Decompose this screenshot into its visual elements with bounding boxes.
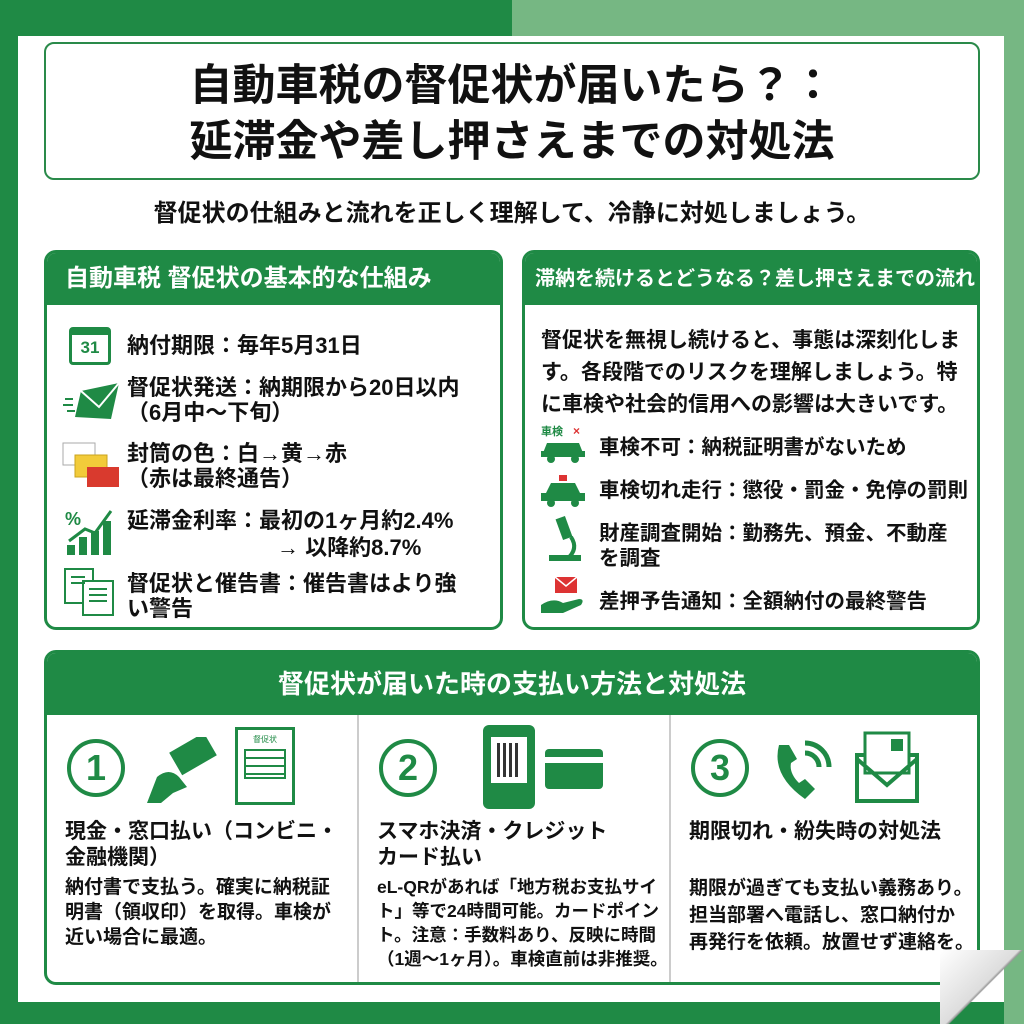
item: sending: 督促状発送：納期限から20日以内 [127, 375, 459, 400]
icon: documents [64, 568, 114, 616]
panel: payment methods [44, 650, 980, 985]
icon: phone [777, 740, 832, 799]
number 3 [691, 739, 749, 797]
icon: car inspection: 車検 [541, 423, 563, 439]
icon: police car [541, 475, 585, 507]
number 3: 3 [710, 747, 730, 788]
description: 担当部署へ電話し、窓口納付か [689, 905, 955, 926]
description: 期限が過ぎても支払い義務あり。 [689, 878, 973, 899]
icon: notice document [235, 727, 295, 805]
icon: calendar: 31 [81, 338, 99, 357]
item: envelope colors: （赤は最終通告） [127, 466, 303, 491]
heading [377, 820, 607, 869]
heading: カード払い [377, 846, 482, 869]
item: asset investigation: 財産調査開始：勤務先、預金、不動産 [599, 522, 948, 545]
title: 自動車税の督促状が届いたら？： [190, 62, 834, 110]
icon: phone QR [483, 725, 535, 809]
item: sending: （6月中〜下旬） [127, 400, 293, 425]
heading: 現金・窓口払い（コンビニ・金融機関） [65, 820, 338, 869]
number 2 [379, 739, 437, 797]
column 2: smartphone [357, 715, 669, 985]
item: reminder vs notice: 督促状と催告書：催告書はより強 [127, 571, 457, 596]
item: asset investigation [599, 522, 948, 570]
icon: calendar [69, 327, 111, 365]
item: seizure notice: 差押予告通知：全額納付の最終警告 [599, 590, 927, 613]
description [689, 878, 974, 953]
number 1: 1 [86, 747, 106, 788]
number 1 [67, 739, 125, 797]
icon: car inspection [541, 423, 585, 463]
item: sending [127, 375, 459, 425]
icon: car inspection: × [573, 424, 580, 438]
panel header [47, 253, 500, 305]
panel header: 自動車税 督促状の基本的な仕組み [65, 265, 432, 292]
panel header [525, 253, 977, 305]
panel: basic mechanism [44, 250, 503, 630]
icon: colored envelopes [62, 442, 119, 487]
item: late fee rate: → 以降約8.7% [277, 535, 421, 560]
background right light strip [512, 0, 1024, 40]
icon: envelope letter [855, 732, 919, 803]
icon: cash hand [147, 737, 217, 803]
title [44, 42, 980, 180]
column 1: cash [65, 727, 338, 948]
item: no inspection: 車検不可：納税証明書がないため [599, 436, 906, 459]
icon: envelope [63, 383, 119, 419]
intro text: 督促状を無視し続けると、事態は深刻化します。各段階でのリスクを理解しましょう。特に車検や社会的信用への影響は大きいです。 [541, 329, 960, 416]
panel header: 督促状が届いた時の支払い方法と対処法 [278, 669, 746, 699]
icon: hand with red envelope [541, 577, 583, 613]
description: 再発行を依頼。放置せず連絡を。 [689, 932, 974, 953]
heading: スマホ決済・クレジット [377, 820, 607, 843]
item: late fee rate [127, 508, 453, 560]
column 3: expired/lost [669, 715, 979, 985]
subtitle: 督促状の仕組みと流れを正しく理解して、冷静に対処しましょう。 [154, 200, 870, 227]
icon: credit card [545, 749, 603, 789]
item: deadline: 納付期限：毎年5月31日 [127, 333, 362, 358]
item: driving without inspection: 車検切れ走行：懲役・罰金・免停の罰則 [599, 479, 968, 502]
page curl [940, 950, 1024, 1024]
icon: notice document: 督促状 [253, 735, 277, 744]
icon: microscope [549, 516, 581, 561]
item: envelope colors: 封筒の色：白→黄→赤 [127, 441, 347, 466]
description: 納付書で支払う。確実に納税証明書（領収印）を取得。車検が近い場合に最適。 [65, 877, 331, 948]
heading: 期限切れ・紛失時の対処法 [689, 820, 941, 843]
panel: flow to seizure [522, 250, 980, 630]
item: reminder vs notice [127, 571, 457, 621]
panel header [47, 653, 977, 715]
item: late fee rate: 延滞金利率：最初の1ヶ月約2.4% [127, 508, 453, 533]
description: eL-QRがあれば「地方税お支払サイト」等で24時間可能。カードポイント。注意：手数料あり、反映に時間（1週〜1ヶ月）。車検直前は非推奨。 [377, 877, 668, 969]
panel header: 滞納を続けるとどうなる？差し押さえまでの流れ [535, 268, 975, 290]
item: asset investigation: を調査 [599, 547, 660, 570]
icon: chart: % [65, 509, 81, 529]
item: envelope colors [127, 441, 347, 491]
item: reminder vs notice: い警告 [127, 596, 193, 621]
title: 延滞金や差し押さえまでの対処法 [190, 118, 834, 166]
icon: chart [65, 509, 112, 555]
number 2: 2 [398, 747, 418, 788]
